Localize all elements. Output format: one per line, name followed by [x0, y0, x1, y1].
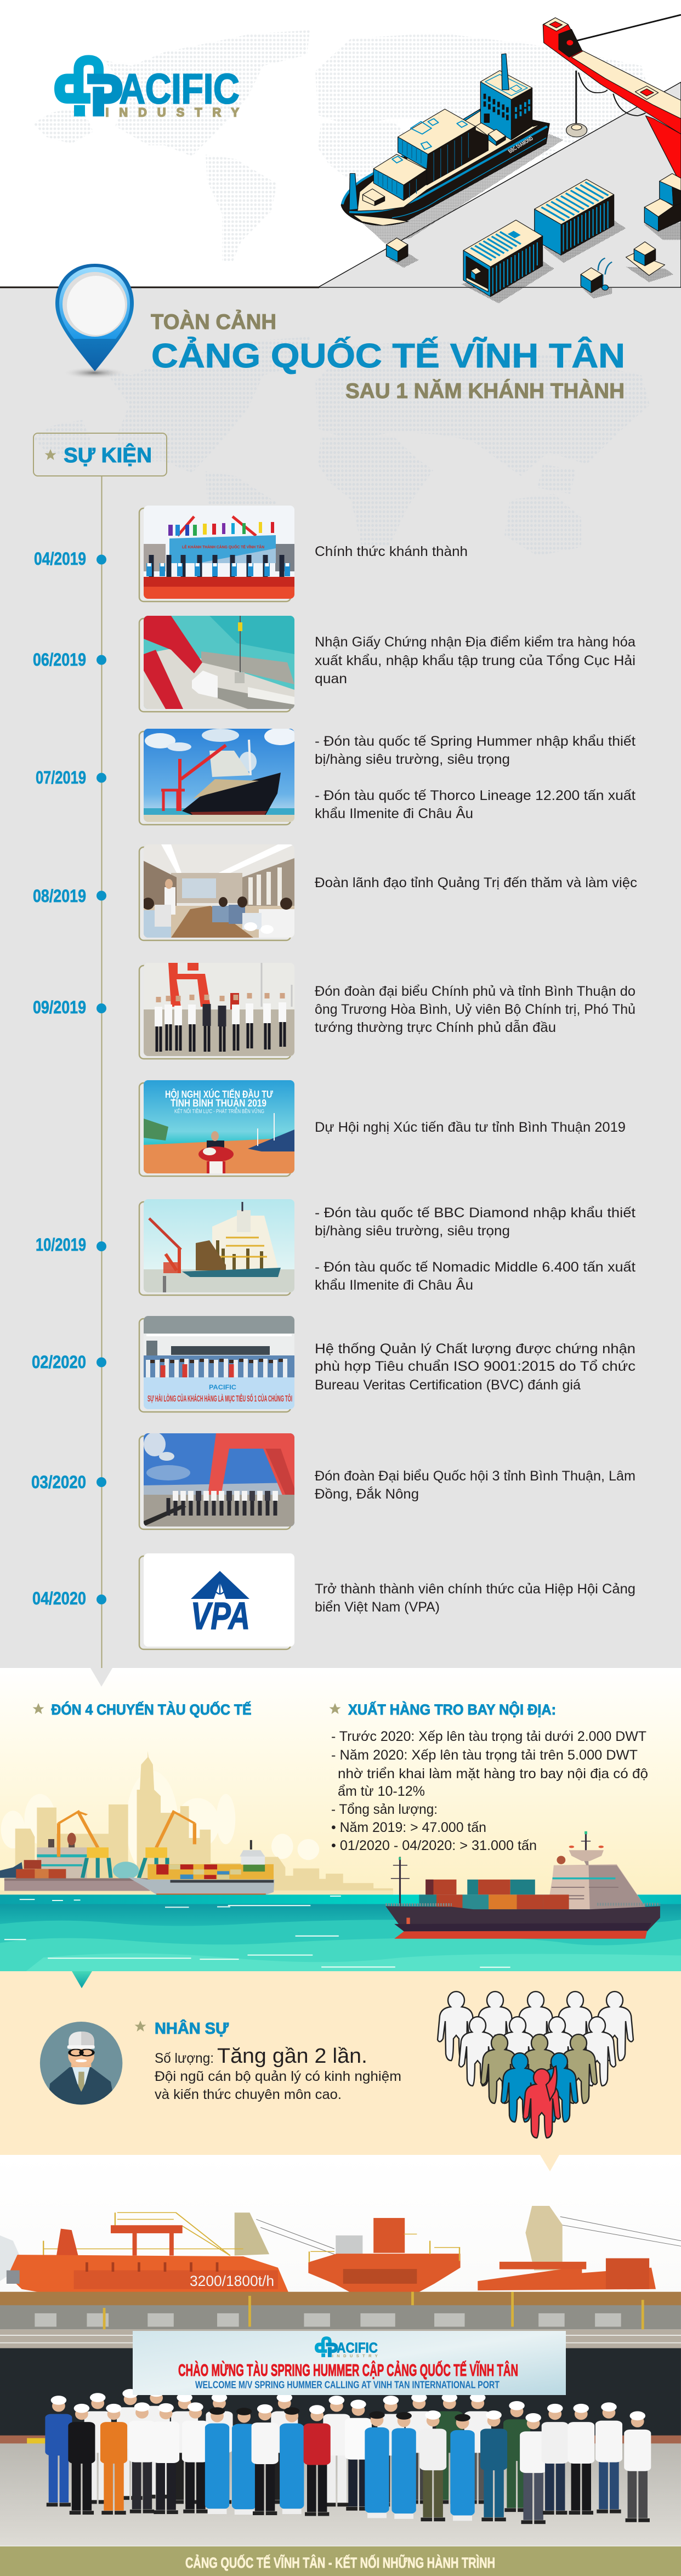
photo: national assembly delegation — [144, 1432, 294, 1527]
cranes on deck — [7, 2206, 681, 2297]
logo: Pacific Industry: ACIFIC — [119, 65, 240, 112]
text: staff: Đội ngũ cán bộ quản lý có kinh nghiệm — [155, 2069, 401, 2084]
arrow: sea to staff — [72, 1971, 92, 1988]
arrow: staff to photo — [540, 2155, 559, 2171]
world dot map on grey — [33, 337, 650, 586]
sea — [0, 1894, 681, 1971]
title: SAU 1 NĂM KHÁNH THÀNH — [345, 379, 625, 403]
text: khẩu Ilmenite đi Châu Âu — [315, 805, 473, 821]
icon: group of people — [438, 1991, 633, 2138]
text: fly ash details: - Tổng sản lượng: — [331, 1802, 438, 1817]
text — [315, 1205, 635, 1293]
photo: conference stage — [144, 1080, 294, 1173]
event 09/2019: 09/2019 — [33, 997, 86, 1017]
text — [315, 1341, 635, 1393]
banner: welcome: INDUSTRY — [332, 2353, 378, 2358]
banner: welcome — [133, 2331, 566, 2395]
event 03/2020 — [31, 1432, 635, 1529]
banner: welcome: ACIFIC — [337, 2340, 378, 2356]
photo: group at Spring Hummer: 3200/1800t/h — [190, 2273, 274, 2289]
text: Bureau Veritas Certification (BVC) đánh giá — [315, 1377, 581, 1393]
event 04/2019 — [34, 506, 468, 602]
event 06/2019: 06/2019 — [33, 650, 86, 669]
text: Trở thành thành viên chính thức của Hiệp Hội Cảng — [315, 1581, 635, 1597]
text: fly ash details: - Trước 2020: Xếp lên tàu trọng tải dưới 2.000 DWT — [331, 1729, 646, 1744]
location pin — [55, 264, 134, 379]
logo: Pacific Industry — [60, 60, 240, 120]
text: fly ash details: ẩm từ 10-12% — [338, 1784, 425, 1799]
grey timeline background — [0, 287, 681, 1668]
event 04/2020 — [32, 1553, 635, 1649]
text — [315, 1581, 635, 1615]
text: - Đón tàu quốc tế Thorco Lineage 12.200 tấn xuất — [315, 788, 635, 803]
heading: Sự kiện: SỰ KIỆN — [64, 443, 152, 467]
banner: welcome: WELCOME M/V SPRING HUMMER CALLING AT VINH TAN INTERNATIONAL PORT — [195, 2380, 500, 2391]
divider line header — [0, 286, 319, 288]
ship 1 — [127, 1840, 275, 1896]
photo: crane and truck — [144, 616, 294, 709]
text: Đón đoàn đại biểu Chính phủ và tỉnh Bình Thuận do — [315, 984, 635, 999]
event 02/2020: SỰ HÀI LÒNG CỦA KHÁCH HÀNG LÀ MỤC TIÊU SỐ 1 CỦA CHÚNG TÔI — [147, 1393, 292, 1404]
crane — [543, 15, 681, 184]
title: CẢNG QUỐC TẾ VĨNH TÂN — [151, 337, 625, 375]
heading: four ships: ĐÓN 4 CHUYẾN TÀU QUỐC TẾ — [52, 1700, 251, 1718]
photo: Spring Hummer ship — [144, 728, 297, 822]
timeline line — [101, 476, 102, 1668]
text: Chính thức khánh thành — [315, 544, 468, 559]
text: khẩu Ilmenite đi Châu Âu — [315, 1277, 473, 1293]
photo: inauguration ceremony — [144, 506, 294, 599]
photo: conference stage: TỈNH BÌNH THUẬN 2019 — [171, 1097, 266, 1109]
text: staff: và kiến thức chuyên môn cao. — [155, 2087, 342, 2102]
text: bị/hàng siêu trường, siêu trọng — [315, 1223, 510, 1239]
skyline — [0, 1751, 393, 1895]
heading: Sự kiện — [33, 433, 167, 476]
photo: conference stage: KẾT NỐI TIỀM LỰC - PHÁT TRIỂN BỀN VỮNG — [174, 1107, 264, 1115]
text: Đón đoàn Đại biểu Quốc hội 3 tỉnh Bình Thuận, Lâm — [315, 1468, 635, 1484]
text: Dự Hội nghị Xúc tiến đầu tư tỉnh Bình Thuận 2019 — [315, 1120, 626, 1135]
panel: human resources — [0, 1971, 681, 2155]
panel: shipping background — [0, 1668, 681, 1894]
text: staff: Số lượng: — [155, 2051, 214, 2066]
photo: meeting room — [142, 844, 294, 938]
event 03/2020: 03/2020 — [31, 1472, 86, 1492]
illustration: port with ship, crane and containers — [318, 15, 681, 303]
text: - Đón tàu quốc tế Spring Hummer nhập khẩu thiết — [315, 734, 635, 749]
illustration: harbour scene with sea — [0, 1751, 681, 1971]
avatar: engineer in helmet — [39, 2022, 123, 2104]
text: Hệ thống Quản lý Chất lượng được chứng nhận — [315, 1341, 635, 1357]
photo: conference stage: HỘI NGHỊ XÚC TIẾN ĐẦU TƯ — [165, 1088, 273, 1100]
text: fly ash details: nhờ triển khai làm mặt hàng tro bay nội địa có độ — [338, 1766, 648, 1781]
text: fly ash details: • 01/2020 - 04/2020: > 31.000 tấn — [331, 1838, 537, 1853]
text: phù hợp Tiêu chuẩn ISO 9001:2015 do Tổ chức — [315, 1359, 635, 1374]
containers and boxes — [387, 173, 681, 303]
photo: inauguration ceremony: LỄ KHÁNH THÀNH CẢNG QUỐC TẾ VĨNH TÂN — [182, 544, 264, 549]
text: tướng thường trực Chính phủ dẫn đầu — [315, 1019, 556, 1035]
header background — [0, 0, 681, 287]
text: fly ash details: - Năm 2020: Xếp lên tàu trọng tải trên 5.000 DWT — [331, 1747, 638, 1763]
heading: fly ash export: XUẤT HÀNG TRO BAY NỘI ĐỊA: — [348, 1701, 556, 1718]
footer — [0, 2546, 681, 2576]
ship deck and hull — [0, 2292, 681, 2546]
title: TOÀN CẢNH — [151, 310, 276, 334]
event 08/2019 — [33, 844, 637, 940]
ship — [341, 54, 564, 243]
cranes and terminal — [0, 1812, 195, 1891]
logo: VPA — [144, 1553, 294, 1647]
text: Đoàn lãnh đạo tỉnh Quảng Trị đến thăm và làm việc — [315, 875, 637, 890]
text: bị/hàng siêu trường, siêu trọng — [315, 752, 510, 767]
crew row behind — [84, 2387, 530, 2512]
arrow: timeline end — [90, 1668, 112, 1687]
logo: Pacific Industry: INDUSTRY — [105, 106, 239, 120]
text — [315, 984, 635, 1035]
photo: BBC Diamond ship — [144, 1199, 294, 1292]
event 08/2019: 08/2019 — [33, 886, 86, 906]
text: Nhận Giấy Chứng nhận Địa điểm kiểm tra hàng hóa — [315, 634, 635, 650]
event 10/2019: 10/2019 — [36, 1235, 86, 1255]
text: - Đón tàu quốc tế Nomadic Middle 6.400 tấn xuất — [315, 1259, 635, 1275]
event: investment conference — [139, 1080, 626, 1176]
text: fly ash details: • Năm 2019: > 47.000 tấn — [331, 1820, 486, 1835]
logo: VPA: VPA — [191, 1595, 250, 1637]
photo: staff group with banner — [144, 1316, 294, 1409]
text: - Đón tàu quốc tế BBC Diamond nhập khẩu thiết — [315, 1205, 635, 1221]
text — [315, 634, 635, 686]
text: staff: Tăng gần 2 lần. — [217, 2045, 367, 2068]
event 04/2020: 04/2020 — [32, 1588, 86, 1608]
quay — [318, 82, 681, 287]
photo: staff group with banner: PACIFIC — [209, 1383, 236, 1391]
crew row front — [45, 2396, 651, 2524]
text: fly ash details — [331, 1729, 648, 1853]
world dot map on white — [33, 30, 650, 261]
ship: BBC DIAMOND — [507, 135, 535, 155]
event 04/2019: 04/2019 — [34, 549, 86, 569]
photo: group at Spring Hummer — [0, 2155, 681, 2546]
heading: Nhân sự: NHÂN SỰ — [155, 2019, 229, 2038]
text: biển Việt Nam (VPA) — [315, 1599, 440, 1615]
text: Đồng, Đắk Nông — [315, 1486, 419, 1502]
ship 2 — [385, 1831, 660, 1939]
photo: government delegation — [144, 963, 294, 1056]
title — [151, 310, 625, 403]
text — [315, 1468, 635, 1502]
event 07/2019: 07/2019 — [36, 768, 86, 787]
text: quan — [315, 671, 347, 686]
text — [315, 734, 635, 821]
text: staff — [155, 2045, 401, 2102]
event 09/2019 — [33, 963, 635, 1059]
text: ông Trương Hòa Bình, Uỷ viên Bộ Chính trị, Phó Thủ — [315, 1002, 635, 1017]
event 02/2020: 02/2020 — [32, 1352, 86, 1372]
event 10/2019 — [36, 1199, 635, 1295]
text: xuất khẩu, nhập khẩu tập trung của Tổng Cục Hải — [315, 653, 635, 668]
event 06/2019 — [33, 616, 635, 712]
event 02/2020 — [32, 1316, 635, 1412]
event 07/2019 — [36, 728, 635, 825]
footer: CẢNG QUỐC TẾ VĨNH TÂN - KẾT NỐI NHỮNG HÀNH TRÌNH — [185, 2554, 495, 2571]
